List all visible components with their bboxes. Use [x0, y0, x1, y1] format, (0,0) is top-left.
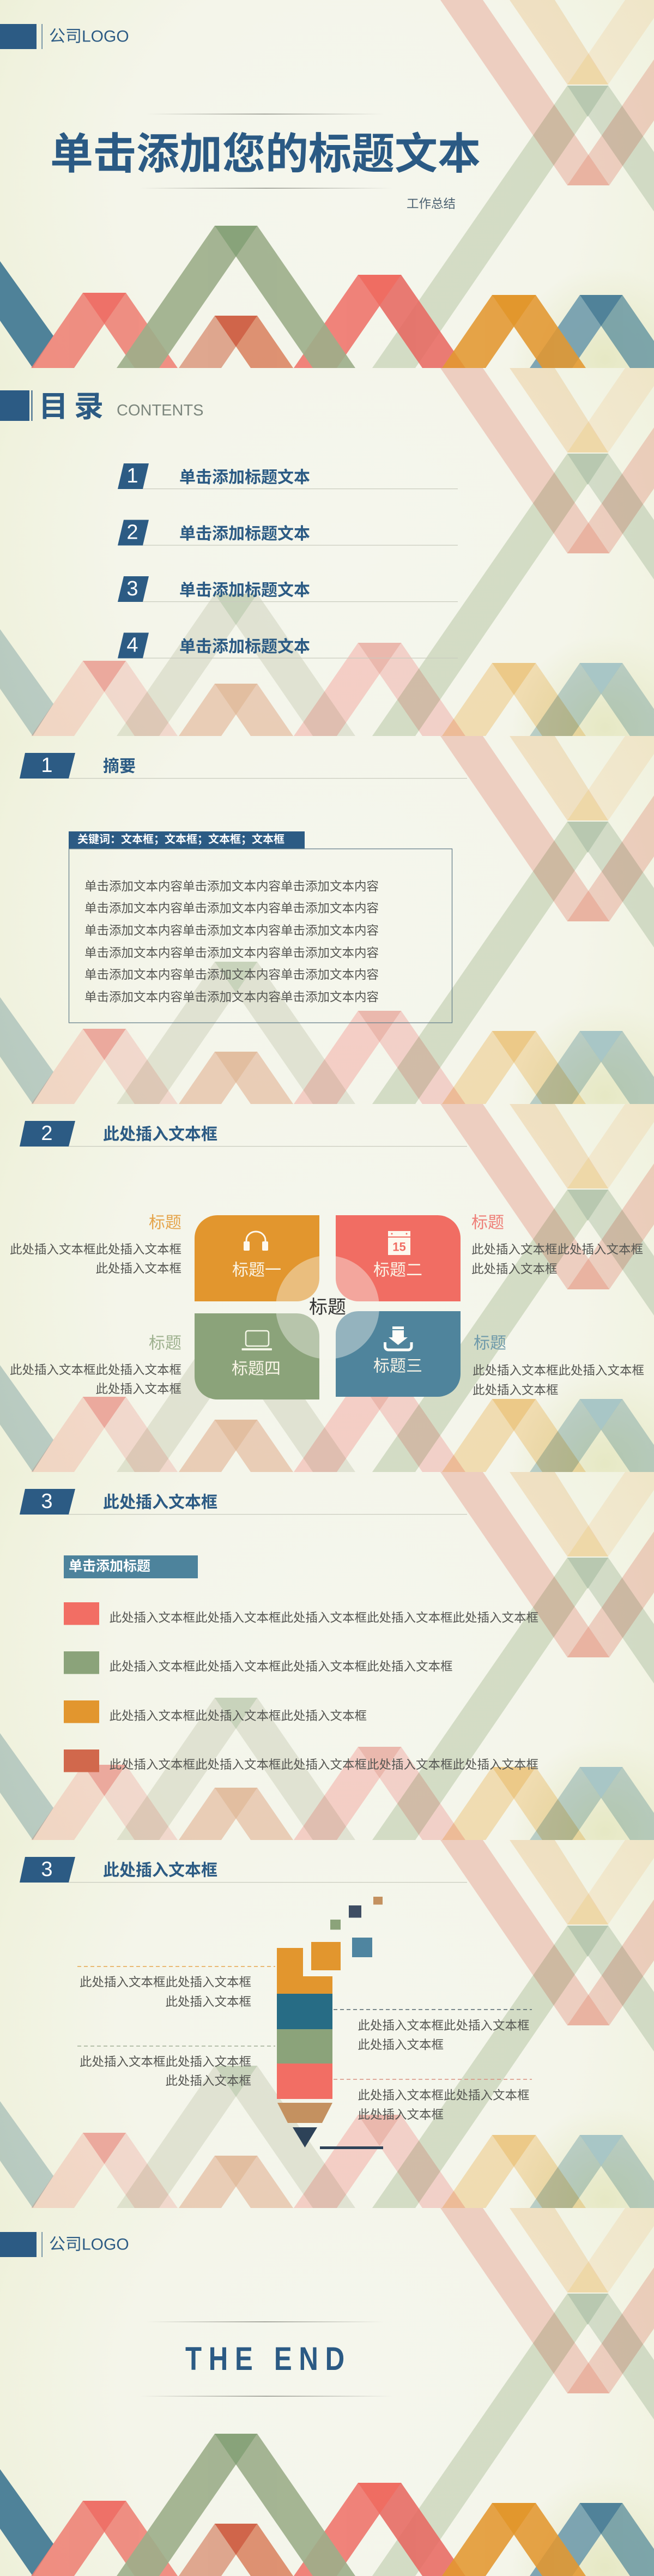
section header 2: 此处插入文本框	[103, 1125, 217, 1144]
icon: calendar	[388, 1231, 410, 1255]
callout top left	[10, 1214, 181, 1276]
contents item 2: 2	[126, 521, 138, 544]
callout left two: 此处插入文本框	[165, 2074, 251, 2088]
keyword tag: 关键词：文本框；文本框；文本框；文本框	[77, 832, 284, 846]
callout left two	[77, 2046, 275, 2088]
callout bottom left	[10, 1335, 181, 1396]
contents item 4: 单击添加标题文本	[179, 638, 310, 656]
callout left one	[77, 1966, 275, 2008]
section header 1	[20, 753, 467, 779]
logo block: 公司LOGO	[49, 27, 129, 46]
background: abstract	[0, 736, 654, 1104]
section header 3: 3	[41, 1490, 53, 1513]
callout bottom right: 此处插入文本框	[473, 1384, 559, 1397]
callout right one: 此处插入文本框此处插入文本框	[358, 2019, 530, 2032]
callout top right	[471, 1214, 643, 1276]
contents item 1	[118, 463, 458, 489]
floating squares	[311, 1897, 383, 1970]
list item 4: 此处插入文本框此处插入文本框此处插入文本框此处插入文本框此处插入文本框	[109, 1758, 538, 1772]
callout right two: 此处插入文本框此处插入文本框	[358, 2089, 530, 2102]
contents item 1: 单击添加标题文本	[179, 469, 310, 486]
callout left two: 此处插入文本框此处插入文本框	[80, 2055, 251, 2068]
section header 3 repeated: 3	[41, 1858, 53, 1881]
label one: 标题一	[232, 1262, 281, 1279]
callout top left: 标题	[149, 1214, 181, 1232]
background: pencil	[0, 1840, 654, 2208]
background: cover ribbons and mountains	[0, 0, 654, 368]
main title: 单击添加您的标题文本	[50, 130, 481, 178]
quadrant 3 teal	[336, 1311, 461, 1397]
slide 3: abstract	[0, 736, 654, 1104]
callout top right: 标题	[471, 1214, 504, 1232]
closing text: THE END	[185, 2340, 352, 2377]
abstract text box: 单击添加文本内容单击添加文本内容单击添加文本内容	[84, 924, 379, 938]
list heading tag	[64, 1555, 198, 1578]
slide 7: the end	[0, 2208, 654, 2576]
label three: 标题三	[373, 1358, 422, 1375]
keyword tag	[69, 831, 305, 849]
quadrant 4 green	[195, 1313, 319, 1399]
callout bottom right: 此处插入文本框此处插入文本框	[473, 1364, 644, 1377]
contents item 2: 单击添加标题文本	[179, 525, 310, 543]
subtitle: 工作总结	[407, 197, 456, 210]
section header 1: 摘要	[103, 758, 136, 775]
callout right one: 此处插入文本框	[358, 2038, 444, 2052]
callout top right: 此处插入文本框此处插入文本框	[471, 1243, 643, 1256]
callout right two	[334, 2079, 532, 2122]
quadrant 1 orange	[195, 1215, 319, 1301]
contents heading	[0, 390, 204, 423]
abstract text box: 单击添加文本内容单击添加文本内容单击添加文本内容	[84, 946, 379, 960]
title rule bottom	[140, 188, 392, 189]
section header 2: 2	[41, 1122, 53, 1145]
contents item 4	[118, 632, 458, 659]
callout bottom left: 此处插入文本框	[95, 1383, 181, 1396]
callout left one: 此处插入文本框此处插入文本框	[80, 1976, 251, 1989]
list item 1	[64, 1602, 538, 1625]
callout bottom left: 标题	[149, 1335, 181, 1352]
icon: calendar: 15	[392, 1240, 406, 1254]
list item 3	[64, 1700, 367, 1723]
list item 3: 此处插入文本框此处插入文本框此处插入文本框	[109, 1709, 367, 1723]
closing rule bottom	[140, 2396, 392, 2397]
quadrant 2 red	[336, 1215, 461, 1301]
contents item 3: 单击添加标题文本	[179, 581, 310, 600]
closing rule top	[146, 2321, 384, 2322]
list item 2	[64, 1651, 453, 1674]
icon: download	[385, 1326, 411, 1350]
pencil underline	[320, 2146, 383, 2149]
callout right two: 此处插入文本框	[358, 2108, 444, 2122]
callout top left: 此处插入文本框此处插入文本框	[10, 1243, 181, 1256]
callout top left: 此处插入文本框	[95, 1262, 181, 1276]
contents item 3	[118, 576, 458, 602]
abstract text box: 单击添加文本内容单击添加文本内容单击添加文本内容	[84, 968, 379, 981]
list item 1: 此处插入文本框此处插入文本框此处插入文本框此处插入文本框此处插入文本框	[109, 1611, 538, 1625]
section header 1: 1	[41, 754, 53, 777]
contents item 1: 1	[126, 464, 138, 487]
slide 6: pencil diagram	[0, 1840, 654, 2208]
logo block	[0, 24, 129, 49]
abstract text box: 单击添加文本内容单击添加文本内容单击添加文本内容	[84, 990, 379, 1004]
background: contents	[0, 368, 654, 736]
list heading tag: 单击添加标题	[69, 1559, 150, 1574]
slide 1: cover	[0, 0, 654, 368]
callout right one	[334, 2010, 532, 2052]
background: closing	[0, 2208, 654, 2576]
section header 3 repeated	[20, 1857, 467, 1883]
background: quadrants	[0, 1104, 654, 1472]
section header 3	[20, 1489, 467, 1515]
contents heading: CONTENTS	[117, 402, 204, 419]
abstract text box: 单击添加文本内容单击添加文本内容单击添加文本内容	[84, 902, 379, 915]
background: list	[0, 1472, 654, 1840]
callout bottom left: 此处插入文本框此处插入文本框	[10, 1363, 181, 1377]
callout bottom right	[473, 1335, 644, 1397]
icon: headphones	[244, 1232, 268, 1251]
section header 2	[20, 1121, 467, 1147]
logo block closing	[0, 2232, 129, 2257]
title rule top	[146, 113, 384, 114]
section header 3 repeated: 此处插入文本框	[103, 1861, 217, 1880]
list item 4	[64, 1749, 538, 1772]
callout top right: 此处插入文本框	[471, 1263, 558, 1276]
section header 3: 此处插入文本框	[103, 1494, 217, 1511]
pencil	[277, 1948, 332, 2147]
slide 4: four quadrants	[0, 1104, 654, 1472]
list item 2: 此处插入文本框此处插入文本框此处插入文本框此处插入文本框	[109, 1660, 453, 1674]
logo block closing: 公司LOGO	[49, 2235, 129, 2254]
abstract text box: 单击添加文本内容单击添加文本内容单击添加文本内容	[84, 880, 379, 893]
icon: laptop	[242, 1331, 272, 1350]
label two: 标题二	[373, 1262, 422, 1279]
callout bottom right: 标题	[474, 1335, 506, 1352]
abstract text box	[69, 849, 452, 1023]
centre label: 标题	[309, 1297, 346, 1318]
slide 5: list	[0, 1472, 654, 1840]
centre circle	[276, 1256, 379, 1359]
callout left one: 此处插入文本框	[165, 1995, 251, 2008]
contents heading: 目录	[39, 390, 110, 423]
contents item 3: 3	[126, 577, 138, 600]
contents item 2	[118, 520, 458, 546]
contents item 4: 4	[126, 634, 138, 656]
label four: 标题四	[232, 1360, 281, 1378]
slide 2: contents	[0, 368, 654, 736]
